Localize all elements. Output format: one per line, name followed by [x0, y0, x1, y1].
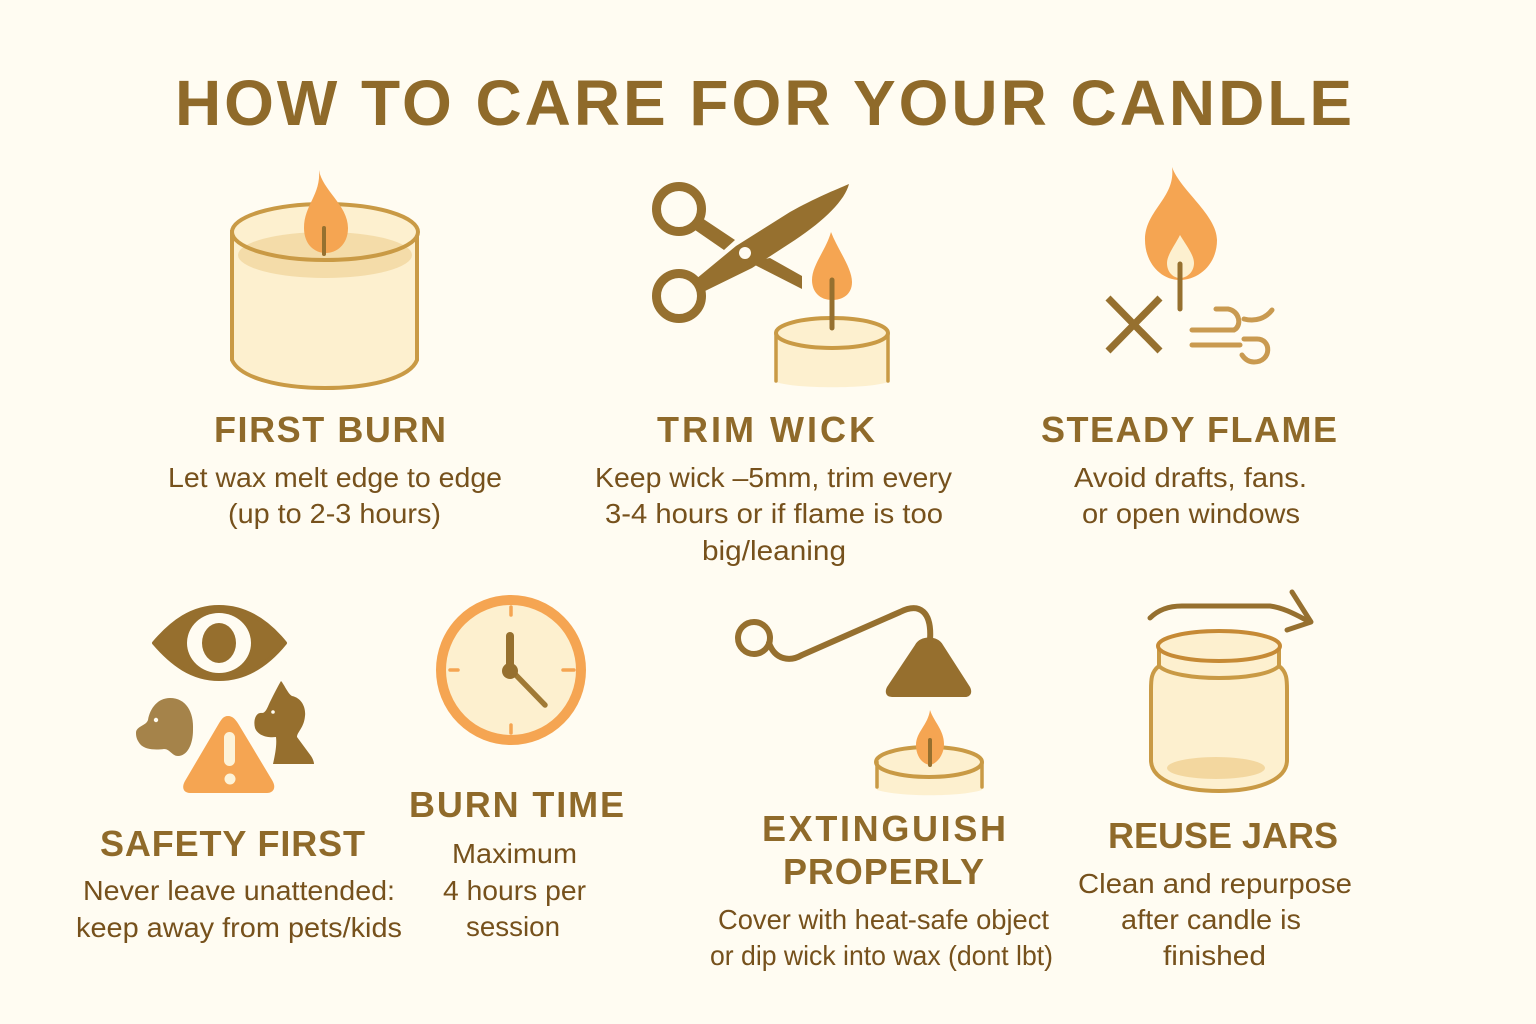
text: extinguish description: or dip wick into wax (dont lbt): [710, 940, 1053, 971]
panel: burn time: [409, 600, 624, 942]
text: safety first description: keep away from pets/kids: [76, 912, 402, 943]
heading: trim wick: TRIM WICK: [657, 409, 875, 450]
text: steady flame description: [1074, 462, 1307, 529]
icon: candle snuffer: [738, 608, 971, 697]
panel: steady flame: [1041, 167, 1337, 529]
text: trim wick description: [595, 462, 952, 566]
text: reuse jars description: finished: [1163, 940, 1266, 971]
text: extinguish description: [710, 904, 1053, 971]
icon: warning triangle: [183, 716, 274, 793]
text: burn time description: [443, 838, 586, 942]
text: safety first description: Never leave unattended:: [83, 875, 395, 906]
panel: trim wick: [595, 184, 952, 566]
text: burn time description: session: [466, 911, 560, 942]
text: first burn description: Let wax melt edge to edge: [168, 462, 502, 493]
title: HOW TO CARE FOR YOUR CANDLE: [175, 67, 1352, 139]
icon: clock: [441, 600, 581, 740]
icon: curved arrow: [1150, 592, 1311, 630]
text: reuse jars description: Clean and repurpose: [1078, 868, 1352, 899]
text: steady flame description: or open windows: [1082, 498, 1300, 529]
heading: extinguish properly: EXTINGUISH: [762, 808, 1006, 849]
text: first burn description: [168, 462, 502, 529]
icon: dog head: [136, 698, 193, 756]
text: steady flame description: Avoid drafts, fans.: [1074, 462, 1307, 493]
heading: extinguish properly: [762, 808, 1006, 892]
icon: small candle with flame: [776, 232, 888, 387]
heading: first burn: FIRST BURN: [214, 409, 446, 450]
icon: scissors: [656, 184, 849, 318]
text: burn time description: Maximum: [452, 838, 577, 869]
icon: cross: [1108, 298, 1160, 351]
text: trim wick description: Keep wick –5mm, trim every: [595, 462, 952, 493]
icon: eye: [154, 607, 285, 679]
panel: safety first: [76, 607, 402, 943]
text: extinguish description: Cover with heat-safe object: [718, 904, 1049, 935]
text: safety first description: [76, 875, 402, 943]
icon: flame with wick: [1145, 167, 1217, 309]
text: trim wick description: big/leaning: [702, 535, 846, 566]
text: reuse jars description: [1078, 868, 1352, 971]
heading: reuse jars: REUSE JARS: [1108, 815, 1338, 856]
panel: first burn: [168, 170, 502, 529]
text: trim wick description: 3-4 hours or if flame is too: [605, 498, 943, 529]
heading: burn time: BURN TIME: [409, 784, 624, 825]
heading: extinguish properly: PROPERLY: [783, 851, 984, 892]
text: first burn description: (up to 2-3 hours): [228, 498, 441, 529]
icon: large candle: [232, 170, 418, 388]
panel: reuse jars: [1078, 592, 1352, 971]
icon: wind: [1192, 309, 1272, 362]
heading: safety first: SAFETY FIRST: [100, 823, 365, 864]
icon: jar: [1151, 631, 1287, 791]
text: burn time description: 4 hours per: [443, 875, 586, 906]
icon: tea light: [876, 710, 982, 795]
icon: cat silhouette: [254, 681, 314, 764]
text: reuse jars description: after candle is: [1121, 904, 1301, 935]
panel: extinguish properly: [710, 608, 1053, 971]
heading: steady flame: STEADY FLAME: [1041, 409, 1337, 450]
